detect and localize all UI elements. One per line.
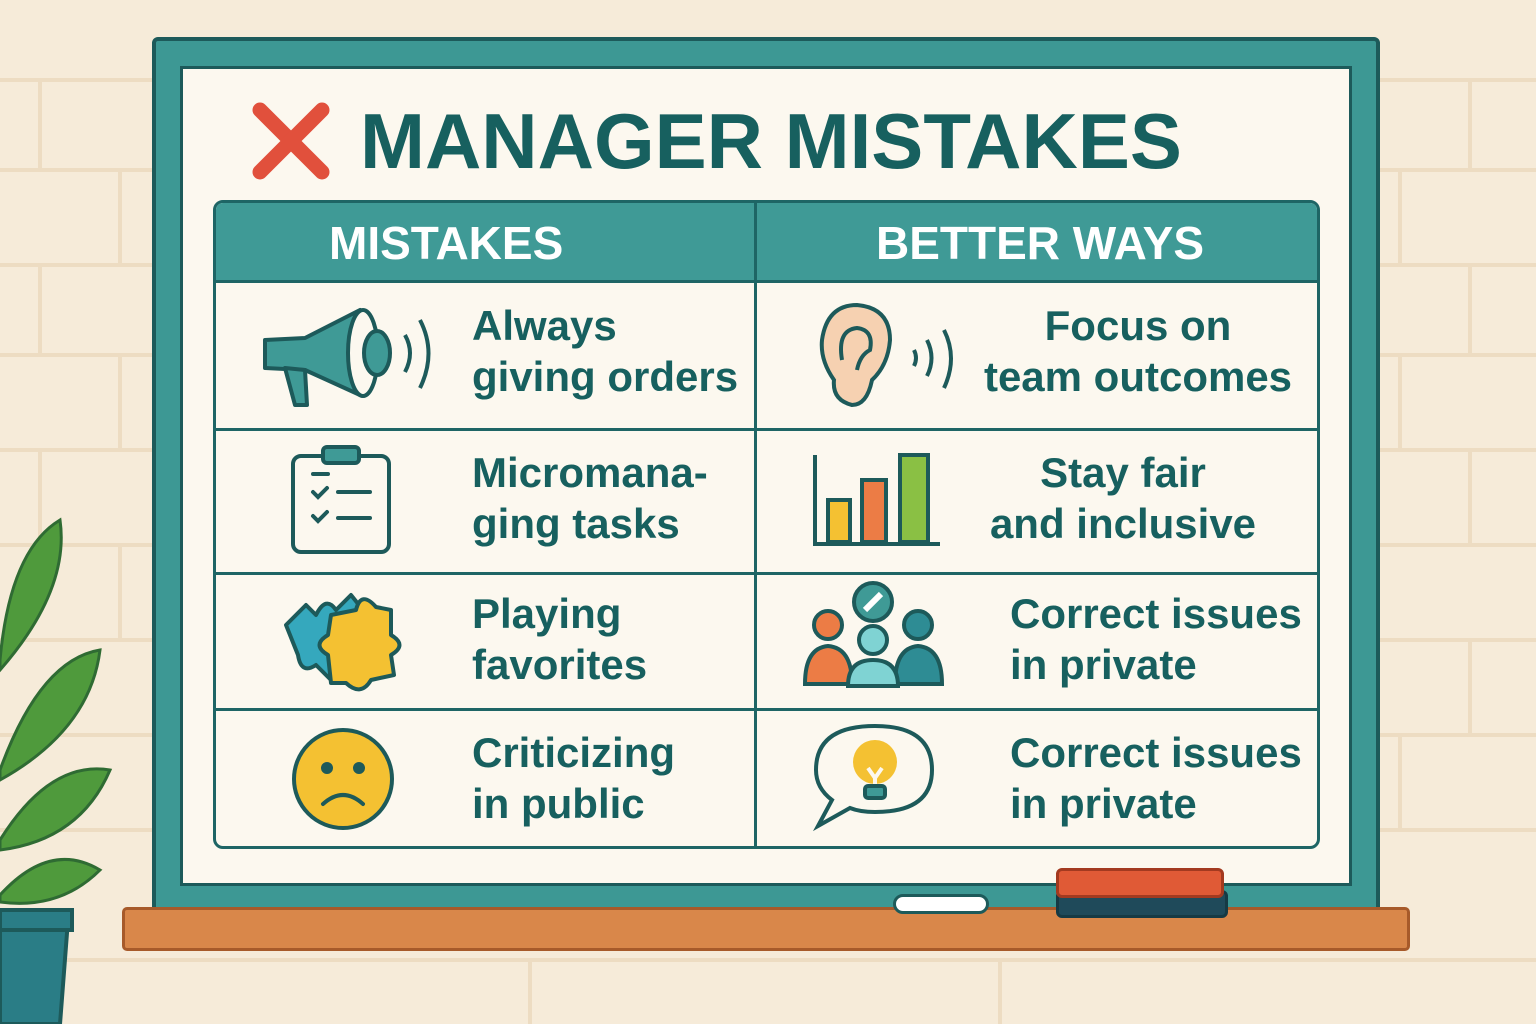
eraser <box>1056 868 1228 918</box>
header: mistakes: MISTAKES <box>329 217 563 269</box>
text: criticizing in public: in public <box>472 780 645 827</box>
text: correct issues in private 1 <box>1010 590 1302 688</box>
table <box>213 200 1320 849</box>
text: criticizing in public <box>472 729 675 827</box>
header: mistakes <box>216 203 756 281</box>
text: playing favorites: Playing <box>472 590 621 637</box>
text: always giving orders: giving orders <box>472 353 738 400</box>
text: always giving orders: Always <box>472 302 617 349</box>
chalk <box>893 894 989 914</box>
text: stay fair and inclusive <box>990 449 1256 547</box>
text: criticizing in public: Criticizing <box>472 729 675 776</box>
icon: sad face <box>292 728 394 830</box>
header: better ways <box>756 203 1326 281</box>
icon: puzzle pieces <box>284 592 402 692</box>
icon: team people <box>803 581 944 688</box>
text: always giving orders <box>472 302 738 400</box>
icon: megaphone <box>263 308 430 407</box>
whiteboard surface <box>180 66 1352 886</box>
text: correct issues in private 2 <box>1010 729 1302 827</box>
icon: clipboard checklist <box>291 445 391 554</box>
icon: bar chart <box>813 453 940 546</box>
icon: ear <box>820 303 953 407</box>
text: correct issues in private 2: in private <box>1010 780 1197 827</box>
text: micromanaging tasks <box>472 449 708 547</box>
chalk tray <box>122 907 1410 951</box>
whiteboard frame <box>152 37 1380 913</box>
icon: red X <box>252 102 330 180</box>
text: correct issues in private 1: in private <box>1010 641 1197 688</box>
text: stay fair and inclusive: Stay fair <box>1040 449 1206 496</box>
title: MANAGER MISTAKES <box>360 97 1182 185</box>
text: playing favorites <box>472 590 647 688</box>
header: better ways: BETTER WAYS <box>876 217 1204 269</box>
text: stay fair and inclusive: and inclusive <box>990 500 1256 547</box>
text: playing favorites: favorites <box>472 641 647 688</box>
text: micromanaging tasks: Micromana- <box>472 449 708 496</box>
text: focus on team outcomes: team outcomes <box>984 353 1292 400</box>
text: correct issues in private 1: Correct issues <box>1010 590 1302 637</box>
text: correct issues in private 2: Correct issues <box>1010 729 1302 776</box>
plant <box>0 518 112 1024</box>
text: micromanaging tasks: ging tasks <box>472 500 680 547</box>
text: focus on team outcomes <box>984 302 1292 400</box>
icon: speech bubble lightbulb <box>813 724 934 831</box>
text: focus on team outcomes: Focus on <box>1045 302 1231 349</box>
